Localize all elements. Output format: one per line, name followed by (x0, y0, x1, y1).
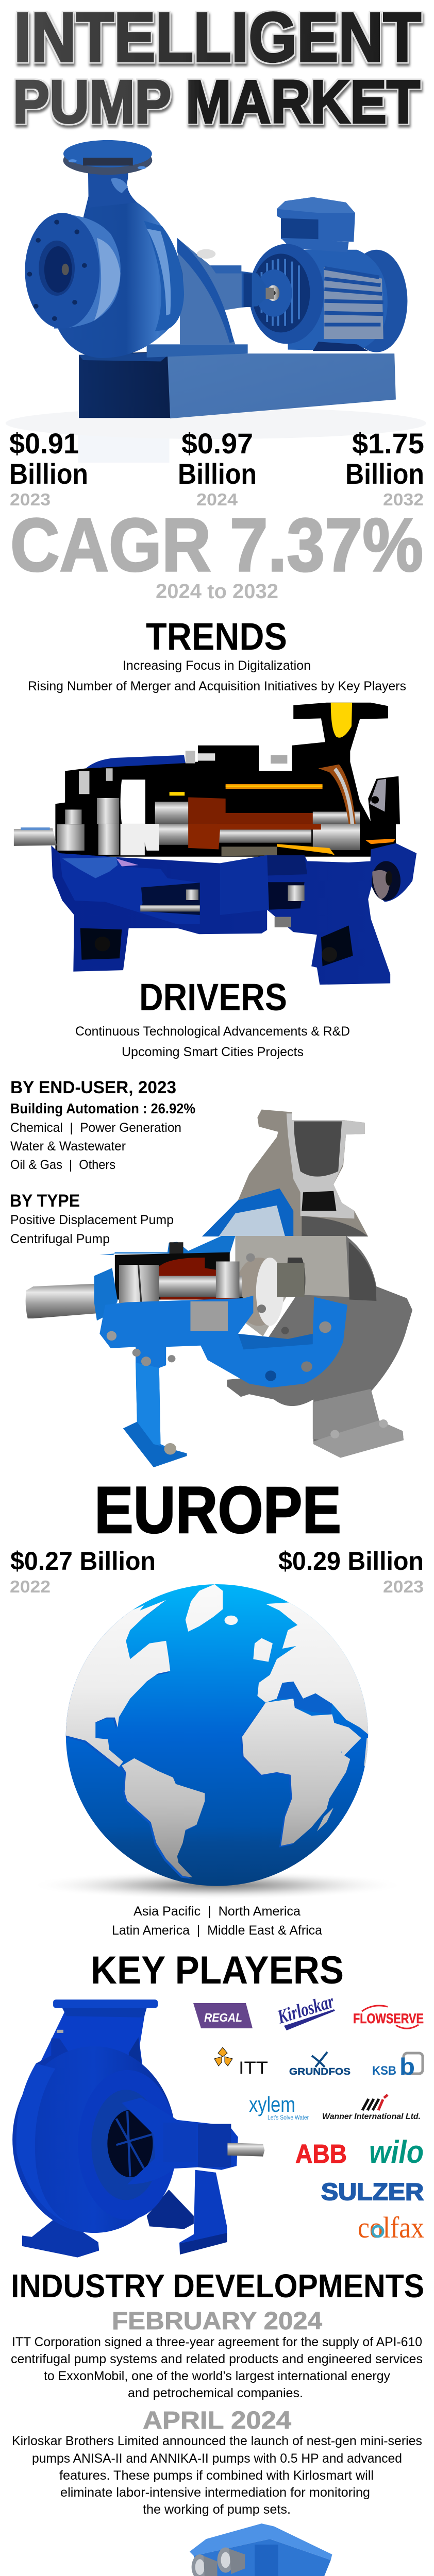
segment: by end-user: Oil & Gas | Others (10, 1158, 115, 1172)
logo: Xylem: Let's Solve Water (268, 2114, 309, 2121)
development text: Kirloskar: eliminate labor-intensive intermediation for monitoring (60, 2485, 370, 2500)
market value 2024: $0.97 (181, 427, 253, 460)
market value 2023: $0.91 (9, 427, 79, 460)
development text: Kirloskar: the working of pump sets. (143, 2502, 291, 2517)
other regions list: Latin America | Middle East & Africa (112, 1923, 322, 1938)
illustration: electric motor (14, 2523, 422, 2576)
logo: KSB: b (399, 2053, 415, 2080)
discharge neck and flange (88, 164, 137, 208)
market value 2024 (178, 427, 257, 509)
heading: Europe: EUROPE (94, 1473, 341, 1547)
illustration: pump cutaway (14, 703, 416, 985)
other regions list: Asia Pacific | North America (133, 1904, 301, 1919)
CAGR period: 2024 to 2032 (156, 580, 278, 603)
market value 2032: Billion (345, 457, 424, 490)
Europe value 2023: 2023 (383, 1577, 424, 1596)
logo: Colfax: colfax (358, 2211, 424, 2244)
logo: Wilo: wilo (369, 2134, 424, 2170)
illustration: sectioned pump with bearing housing (26, 1110, 412, 1467)
market value 2024: 2024 (196, 490, 238, 509)
development text: Kirloskar: pumps ANISA-II and ANNIKA-II pumps with 0.5 HP and advanced (32, 2451, 402, 2466)
development date: February 2024: FEBRUARY 2024 (112, 2308, 322, 2335)
segment: by end-user: BY END-USER, 2023 (10, 1078, 176, 1097)
illustration: globe (66, 1584, 368, 1897)
illustration: large blue volute pump (12, 1999, 264, 2258)
development text: Kirloskar: Kirloskar Brothers Limited announced the launch of nest-gen mini-series (12, 2434, 422, 2448)
segment: by type: BY TYPE (10, 1191, 80, 1211)
trends list: Rising Number of Merger and Acquisition Initiatives by Key Players (28, 679, 406, 693)
Europe value 2023 (278, 1547, 424, 1596)
drivers list (75, 1024, 350, 1059)
logo: KSB: KSB (372, 2064, 396, 2078)
segment: by end-user (10, 1078, 195, 1172)
logo: Regal: REGAL (204, 2011, 242, 2024)
segment: by end-user: Chemical | Power Generation (10, 1121, 181, 1135)
segment: by end-user: Building Automation : 26.92% (10, 1100, 195, 1116)
logo: Regal (193, 2003, 253, 2028)
logo: Flowserve (353, 2006, 424, 2028)
bearing housing and coupling (177, 238, 241, 344)
Europe value 2022: $0.27 Billion (10, 1547, 156, 1575)
logo: ITT (214, 2047, 268, 2078)
logos: key player companies (193, 1990, 424, 2244)
drivers list: Continuous Technological Advancements & R&D (75, 1024, 350, 1039)
development text: ITT: centrifugal pump systems and related products and engineered services (11, 2352, 423, 2366)
development text: Kirloskar: features. These pumps if combined with Kirlosmart will (59, 2468, 374, 2483)
heading: drivers: DRIVERS (139, 976, 287, 1019)
segment: by end-user: Water & Wastewater (10, 1139, 126, 1154)
trends list (28, 658, 406, 693)
market value 2023 (9, 427, 88, 509)
market value 2032: 2032 (383, 490, 424, 509)
logo: Grundfos (289, 2052, 350, 2077)
terminal box (281, 238, 349, 252)
logo: Grundfos: GRUNDFOS (289, 2066, 350, 2077)
logo: KSB (372, 2053, 423, 2080)
Europe value 2022 (10, 1547, 156, 1596)
logo: Xylem: xylem (249, 2092, 295, 2116)
Europe value 2022: 2022 (10, 1577, 51, 1596)
development text: ITT (11, 2335, 423, 2400)
market value 2023: Billion (9, 457, 88, 490)
motor front (249, 244, 324, 344)
cable glands (192, 2554, 208, 2576)
logo: ITT: ITT (239, 2058, 268, 2078)
segment: by type: Positive Displacement Pump (10, 1213, 174, 1227)
logo: Sulzer: SULZER (321, 2178, 424, 2205)
title (13, 0, 421, 136)
segment: by type (10, 1191, 174, 1246)
development text: Kirloskar (12, 2434, 422, 2517)
segment: by type: Centrifugal Pump (10, 1232, 110, 1246)
logo: Kirloskar (275, 1990, 337, 2030)
pump volute (57, 195, 183, 358)
trends list: Increasing Focus in Digitalization (123, 658, 311, 673)
logo: Wanner International: Wanner International Ltd. (322, 2112, 421, 2121)
logo: Kirloskar: Kirloskar (275, 1990, 337, 2028)
development text: ITT: and petrochemical companies. (128, 2386, 303, 2400)
logo: Wanner International (322, 2095, 421, 2121)
market value 2023: 2023 (10, 490, 51, 509)
illustration: blue centrifugal pump with motor (6, 140, 426, 463)
heading: key players: KEY PLAYERS (91, 1948, 344, 1992)
development date: April 2024: APRIL 2024 (143, 2407, 291, 2434)
motor rear and body (345, 250, 407, 352)
other regions list (112, 1904, 322, 1938)
market value 2024: Billion (178, 457, 257, 490)
market value 2032 (345, 427, 424, 509)
logo: ABB: ABB (295, 2139, 347, 2168)
drivers list: Upcoming Smart Cities Projects (122, 1045, 304, 1059)
development text: ITT: to ExxonMobil, one of the world’s largest international energy (44, 2369, 390, 2383)
heading: trends: TRENDS (146, 615, 287, 658)
Europe value 2023: $0.29 Billion (278, 1547, 424, 1575)
development text: ITT: ITT Corporation signed a three-year agreement for the supply of API-610 (12, 2335, 422, 2349)
suction flange (54, 214, 121, 329)
blue body (51, 845, 390, 985)
market value 2032: $1.75 (352, 427, 424, 460)
